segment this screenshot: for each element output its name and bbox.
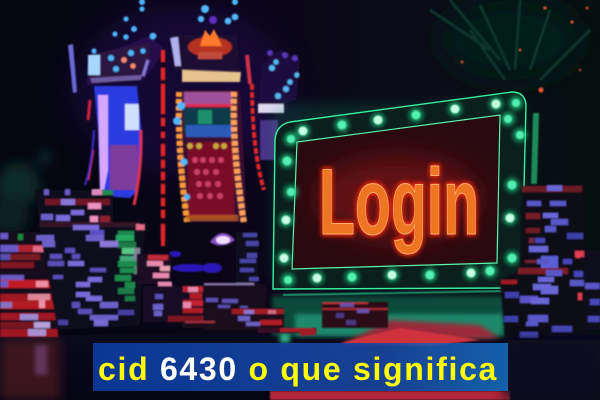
chip stack: in front of sign xyxy=(300,302,388,336)
chip stack: right xyxy=(500,184,600,338)
login sign xyxy=(273,92,539,295)
login text: Login xyxy=(319,149,479,254)
chip stack: far left xyxy=(0,232,60,337)
sign glow xyxy=(272,104,526,286)
chip stack: back right of centre xyxy=(182,232,316,333)
floor xyxy=(0,335,600,400)
foliage: left teal bokeh xyxy=(0,154,48,235)
slot machine: left xyxy=(68,0,165,205)
slot machine: right background xyxy=(258,50,300,160)
sign frame xyxy=(273,92,526,289)
sign red panel xyxy=(292,115,500,269)
right floor reflection xyxy=(505,340,600,400)
machine glow xyxy=(70,5,290,175)
title text: cid 6430 o que significa xyxy=(98,351,498,387)
foliage: top right palm with red lights xyxy=(430,0,590,93)
login sign: Login xyxy=(319,149,479,254)
chip stack: centre left xyxy=(35,189,145,330)
slot machine: centre xyxy=(160,0,264,273)
chip stack: middle xyxy=(137,254,205,322)
sign lights xyxy=(277,96,527,287)
title banner xyxy=(93,343,508,391)
floor reflections xyxy=(0,296,510,400)
